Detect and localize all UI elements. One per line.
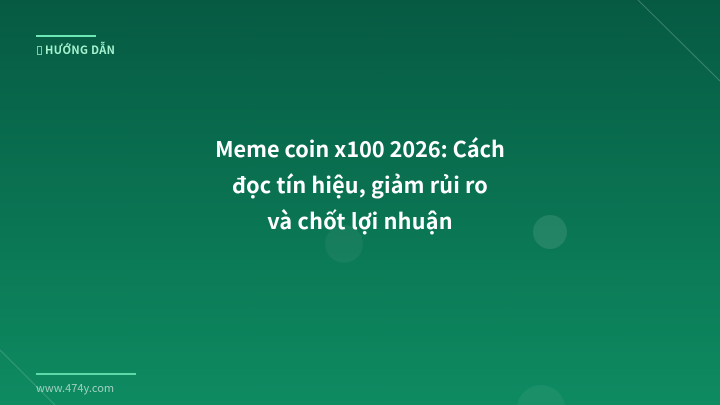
- title: và chốt lợi nhuận: [267, 205, 453, 236]
- category label: HƯỚNG DẪN: [45, 42, 115, 58]
- top accent line: [36, 35, 96, 37]
- title: [215, 133, 505, 236]
- website url: www.474y.com: [36, 380, 114, 396]
- title: đọc tín hiệu, giảm rủi ro: [232, 169, 488, 200]
- title: Meme coin x100 2026: Cách: [215, 133, 505, 164]
- bottom accent line: [36, 373, 136, 375]
- icon: missing glyph box: [37, 46, 42, 55]
